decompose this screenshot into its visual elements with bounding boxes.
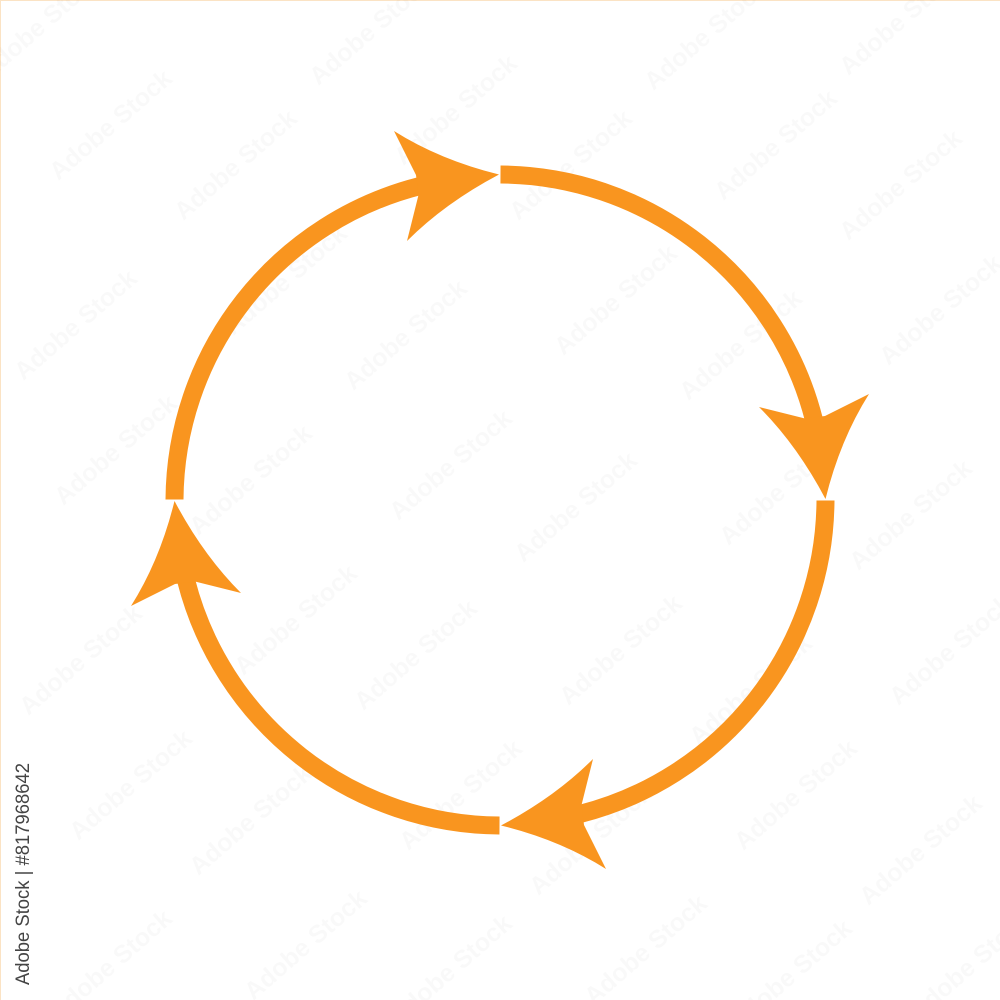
stock watermark pattern: Adobe Stock — [394, 734, 528, 856]
arrow: bottom left, pointing up — [131, 501, 500, 826]
stock watermark pattern: Adobe Stock — [219, 219, 353, 341]
stock watermark pattern: Adobe Stock — [844, 454, 978, 576]
arrow: bottom right, pointing left — [501, 500, 826, 869]
stock watermark pattern: Adobe Stock — [9, 264, 143, 386]
stock watermark pattern: Adobe Stock — [339, 274, 473, 396]
stock watermark pattern: Adobe Stock — [684, 629, 818, 751]
stock watermark pattern: Adobe Stock — [509, 446, 643, 568]
stock watermark pattern: Adobe Stock — [854, 789, 988, 911]
stock watermark pattern: Adobe Stock — [834, 124, 968, 246]
stock image id label: Adobe Stock | #817968642 — [12, 763, 34, 985]
stock watermark pattern: Adobe Stock — [389, 49, 523, 171]
stock watermark pattern: Adobe Stock — [549, 239, 683, 361]
stock watermark pattern: Adobe Stock — [229, 559, 363, 681]
stock watermark pattern: Adobe Stock — [384, 404, 518, 526]
stock watermark pattern: Adobe Stock — [184, 419, 318, 541]
stock watermark pattern: Adobe Stock — [709, 84, 843, 206]
stock watermark pattern: Adobe Stock — [14, 599, 148, 721]
stock watermark pattern: Adobe Stock — [714, 429, 848, 551]
stock watermark pattern: Adobe Stock — [64, 724, 198, 846]
stock watermark pattern: Adobe Stock — [554, 589, 688, 711]
stock watermark pattern: Adobe Stock — [524, 779, 658, 901]
stock watermark pattern: Adobe Stock — [184, 759, 318, 881]
arrow: top right, pointing down — [500, 174, 869, 499]
arrow: top left, pointing right — [174, 131, 499, 500]
circular cycle of four arrows — [131, 131, 869, 869]
stock watermark pattern: Adobe Stock — [349, 594, 483, 716]
stock watermark pattern: Adobe Stock — [674, 284, 808, 406]
stock watermark pattern: Adobe Stock — [504, 104, 638, 226]
stock watermark pattern: Adobe Stock — [49, 389, 183, 511]
stock watermark pattern: Adobe Stock — [44, 64, 178, 186]
stock watermark pattern: Adobe Stock — [729, 734, 863, 856]
stock watermark pattern: Adobe Stock — [169, 104, 303, 226]
